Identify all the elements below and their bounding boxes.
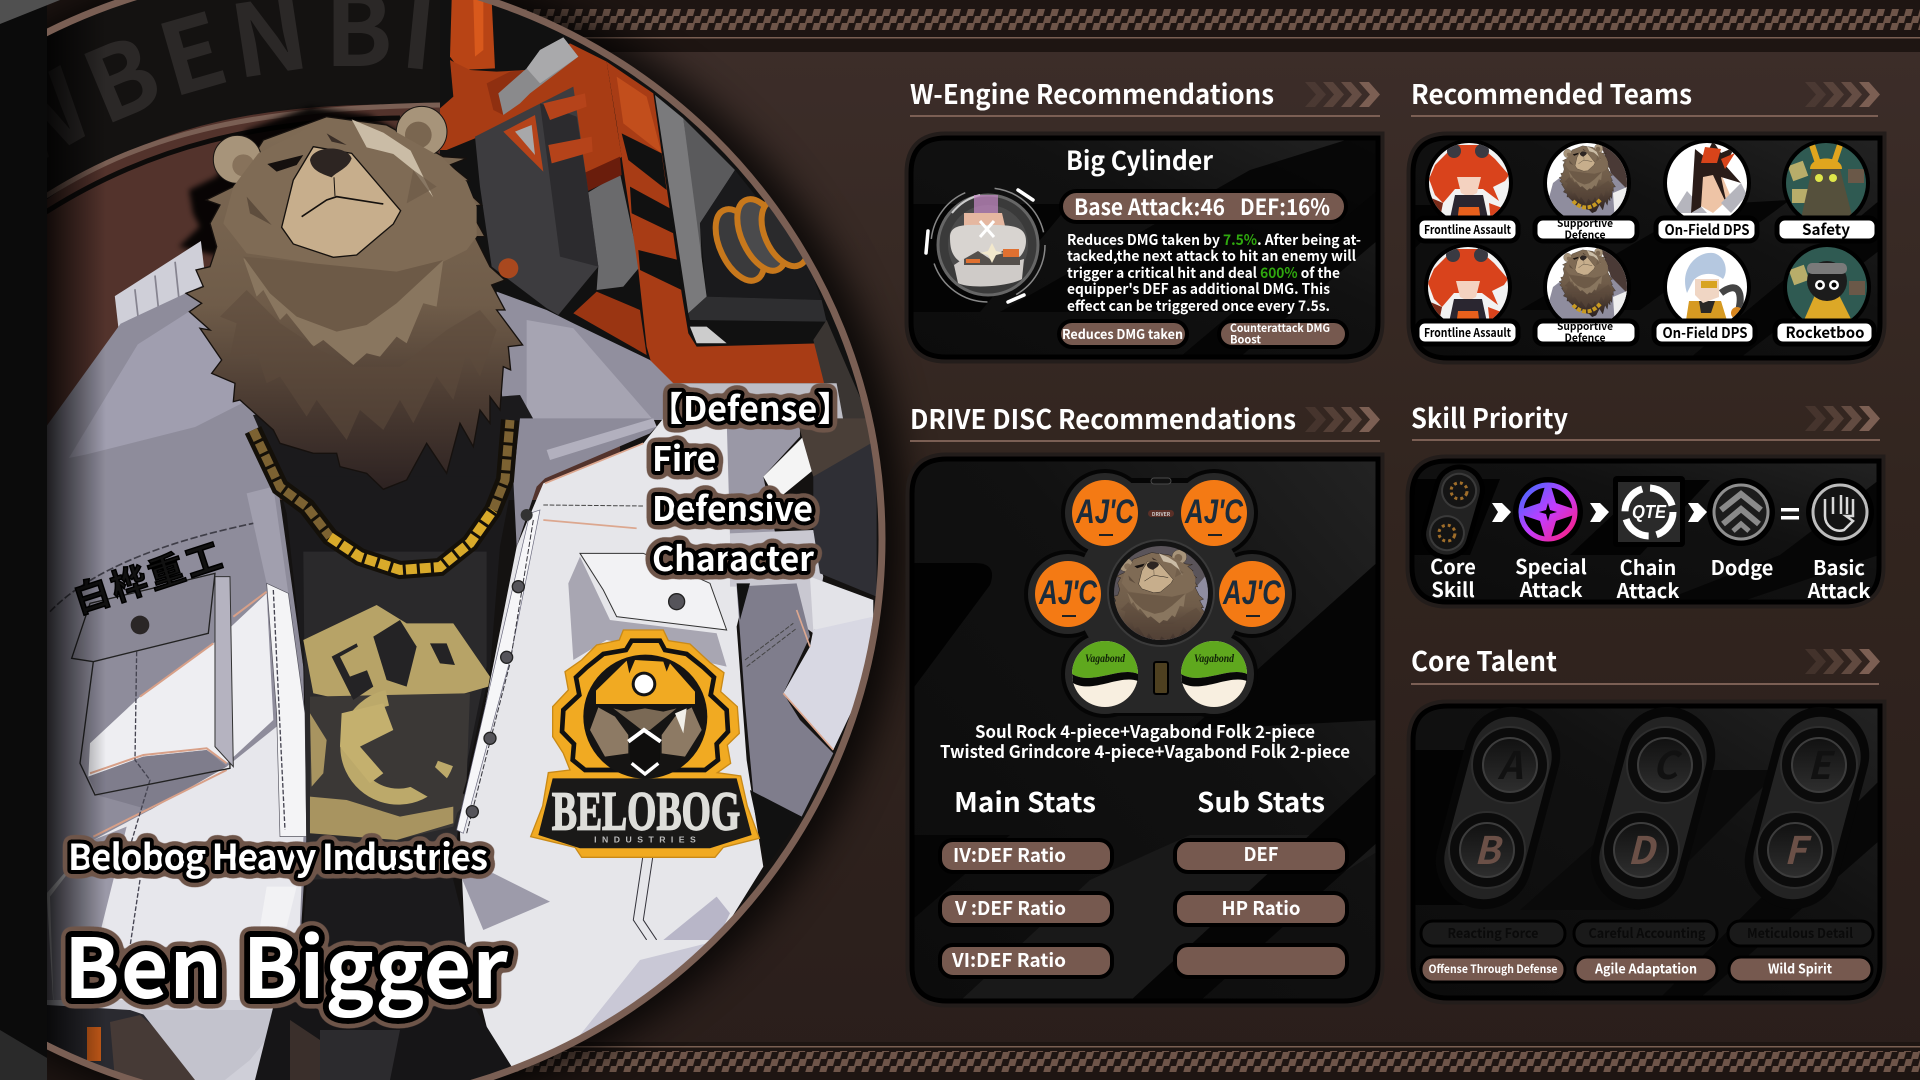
Vagabond discs: Vagabond <box>1085 651 1126 665</box>
label: On-Field DPS: On-Field DPS <box>1664 219 1750 240</box>
portrait: Frontline Assault <box>1425 140 1513 216</box>
left shading <box>46 0 106 1080</box>
unselected talent pills: Reacting Force <box>1448 922 1539 942</box>
Soul Rock discs: AJ'C <box>1075 493 1134 531</box>
unselected talent pills: Careful Accounting <box>1588 922 1706 942</box>
Soul Rock discs <box>1035 480 1285 627</box>
skill labels: Attack <box>1519 574 1582 603</box>
selected talent pills: Agile Adaptation <box>1594 958 1697 978</box>
Main Stats column: Main Stats <box>954 781 1096 820</box>
driver emblem: DRIVER <box>1152 511 1171 518</box>
panel: W-Engine <box>905 130 1385 362</box>
arrow <box>1590 503 1609 522</box>
arrow <box>1688 503 1707 522</box>
bear head and mane <box>186 106 523 489</box>
panel: Core Talent <box>1405 696 1885 1000</box>
icon: dodge <box>1707 478 1775 546</box>
arrow <box>1492 503 1511 522</box>
Sub Stats column: DEF <box>1244 840 1278 867</box>
label: Rocketboo: Rocketboo <box>1786 321 1865 343</box>
tag: counterattack boost: Counterattack DMG <box>1230 320 1330 336</box>
W-Engine name: Big Cylinder <box>1066 141 1214 178</box>
Belobog logo: BELOBOG <box>552 780 740 841</box>
left dark strip <box>0 0 60 1080</box>
portrait: Supportive Defence <box>1543 140 1631 216</box>
Soul Rock discs: AJ'C <box>1222 574 1281 612</box>
skill labels: Core <box>1430 551 1476 580</box>
W-Engine effect description: trigger a critical hit and deal 600% of the <box>1067 262 1340 283</box>
Soul Rock discs: AJ'C <box>1038 574 1097 612</box>
neck shirt <box>253 395 545 500</box>
heading: Skill Priority <box>1411 397 1880 441</box>
icon: chain attack QTE: QTE <box>1632 502 1667 522</box>
label: Supportive Defence: Supportive <box>1557 216 1613 231</box>
tag: counterattack boost: Boost <box>1230 332 1261 348</box>
portrait: Rocketboo <box>1784 244 1871 318</box>
icon: chain attack QTE <box>1613 476 1685 547</box>
panel: Recommended Teams <box>1407 132 1887 362</box>
Belobog logo: INDUSTRIES <box>594 835 696 845</box>
Main Stats column <box>940 781 1112 977</box>
label: Frontline Assault <box>1417 218 1518 241</box>
base stats pill: Base Attack:46 <box>1074 190 1225 222</box>
bottom checker band <box>0 1042 1920 1080</box>
driver emblem <box>1148 478 1174 694</box>
panel: Skill Priority <box>1405 455 1885 605</box>
heading: Skill Priority: Skill Priority <box>1411 397 1568 436</box>
portrait: Safety <box>1782 140 1870 216</box>
role tags: Fire <box>652 432 716 481</box>
skill labels <box>1430 551 1870 604</box>
heading: Recommended Teams <box>1411 73 1880 117</box>
talent capsule E and F: E <box>1807 735 1835 790</box>
disc set recommendations: Twisted Grindcore 4-piece+Vagabond Folk 2-piece <box>940 739 1350 764</box>
label: Safety: Safety <box>1802 218 1850 240</box>
selected talent pills <box>1421 957 1872 982</box>
role tags: Defensive <box>652 482 813 531</box>
Sub Stats column: HP Ratio <box>1222 894 1301 921</box>
bear shadow <box>178 106 396 258</box>
unselected talent pills: Meticulous Detail <box>1747 922 1853 942</box>
gold chain <box>253 420 510 570</box>
W-Engine orb <box>926 188 1045 302</box>
portrait: Supportive Defence second team <box>1543 244 1627 318</box>
portrait: On-Field DPS Lighter <box>1663 140 1751 216</box>
tag: counterattack boost <box>1219 320 1347 348</box>
label: Frontline Assault second team: Frontline Assault <box>1424 324 1511 341</box>
W-Engine effect description <box>1067 229 1361 316</box>
weapon <box>440 0 907 420</box>
icon: basic attack <box>1806 478 1874 546</box>
heading: Core Talent: Core Talent <box>1411 640 1557 679</box>
faction name: Belobog Heavy Industries <box>68 829 488 881</box>
label: On-Field DPS second team: On-Field DPS <box>1662 322 1748 343</box>
left jacket and pocket <box>47 477 513 1003</box>
chest badge lettering: 白桦重工 <box>66 526 231 624</box>
disc set recommendations: Soul Rock 4-piece+Vagabond Folk 2-piece <box>975 719 1315 744</box>
talent capsule C and D: D <box>1627 820 1658 875</box>
talent capsule E and F: F <box>1784 820 1812 875</box>
Main Stats column: IV:DEF Ratio <box>953 841 1066 868</box>
selected talent pills: Wild Spirit <box>1768 958 1832 978</box>
panel: Drive Disc <box>905 452 1385 1004</box>
Vagabond discs <box>1072 641 1247 707</box>
top checker band <box>0 0 1920 52</box>
talent capsule A and B: B <box>1474 820 1504 875</box>
selected talent pills: Offense Through Defense <box>1428 961 1558 977</box>
ring shadow <box>0 0 907 1080</box>
Vagabond discs: Vagabond <box>1194 651 1235 665</box>
character name: Ben Bigger <box>64 903 508 1022</box>
drive disc board <box>1024 469 1296 718</box>
label: Frontline Assault: Frontline Assault <box>1424 221 1511 238</box>
role tags <box>649 382 851 581</box>
W-Engine effect description: equipper's DEF as additional DMG. This <box>1067 278 1330 299</box>
center bear portrait <box>1114 546 1208 640</box>
talent capsule A and B <box>1425 696 1571 920</box>
Belobog logo <box>531 630 759 857</box>
Sub Stats column <box>1175 781 1347 977</box>
role tags: 【Defense】 <box>649 382 851 431</box>
W-Engine effect description: effect can be triggered once every 7.5s. <box>1067 295 1330 316</box>
portrait ring <box>0 0 882 1080</box>
talent capsule E and F <box>1734 696 1880 920</box>
talent capsule A and B: A <box>1497 735 1523 790</box>
brown backdrop <box>46 104 620 500</box>
talent capsule C and D: C <box>1653 735 1683 790</box>
upper jacket <box>47 241 266 477</box>
portrait: Frontline Assault second team <box>1424 244 1512 318</box>
heading: Core Talent <box>1411 640 1880 685</box>
heading: W-Engine: W-Engine Recommendations <box>910 73 1274 112</box>
right jacket <box>457 418 877 942</box>
icon: core skill <box>1418 461 1488 563</box>
Soul Rock discs: AJ'C <box>1184 493 1243 531</box>
skill labels: Dodge <box>1711 552 1773 581</box>
skill labels: Attack <box>1616 575 1679 604</box>
unselected talent pills <box>1421 921 1873 946</box>
label: Supportive Defence second team: Defence <box>1564 330 1606 346</box>
label: Frontline Assault second team <box>1417 321 1518 344</box>
skill labels: Special <box>1515 551 1587 580</box>
role tags: Character <box>652 532 814 581</box>
label: Supportive Defence second team: Supportive <box>1557 319 1613 334</box>
W-Engine effect description: tacked,the next attack to hit an enemy will <box>1067 245 1356 266</box>
skill labels: Attack <box>1807 575 1870 604</box>
skill labels: Skill <box>1431 574 1475 603</box>
portrait: On-Field DPS Soldier <box>1664 247 1751 318</box>
heading: Drive Disc: DRIVE DISC Recommendations <box>910 398 1296 437</box>
base stats pill <box>1061 190 1346 222</box>
skill labels: Basic <box>1813 552 1865 581</box>
skill labels: Chain <box>1620 552 1676 581</box>
label: Supportive Defence second team <box>1535 319 1637 346</box>
icon: special attack <box>1513 477 1583 547</box>
Main Stats column: V :DEF Ratio <box>954 894 1066 921</box>
label: Supportive Defence: Defence <box>1564 228 1606 242</box>
label: Safety <box>1777 218 1877 241</box>
disc set recommendations <box>940 719 1350 764</box>
tag: reduces damage: Reduces DMG taken <box>1062 323 1183 343</box>
Main Stats column: VI:DEF Ratio <box>951 946 1066 973</box>
heading: Recommended Teams: Recommended Teams <box>1411 73 1692 112</box>
equals sign <box>1781 508 1799 520</box>
W-Engine effect description: Reduces DMG taken by 7.5%. After being at- <box>1067 229 1361 250</box>
label: Supportive Defence <box>1535 216 1637 242</box>
talent capsule C and D <box>1580 696 1726 920</box>
Sub Stats column: Sub Stats <box>1197 781 1325 820</box>
lower jacket and machinery <box>47 940 709 1080</box>
base stats pill: DEF:16% <box>1240 190 1330 222</box>
character illustration <box>47 0 878 1080</box>
